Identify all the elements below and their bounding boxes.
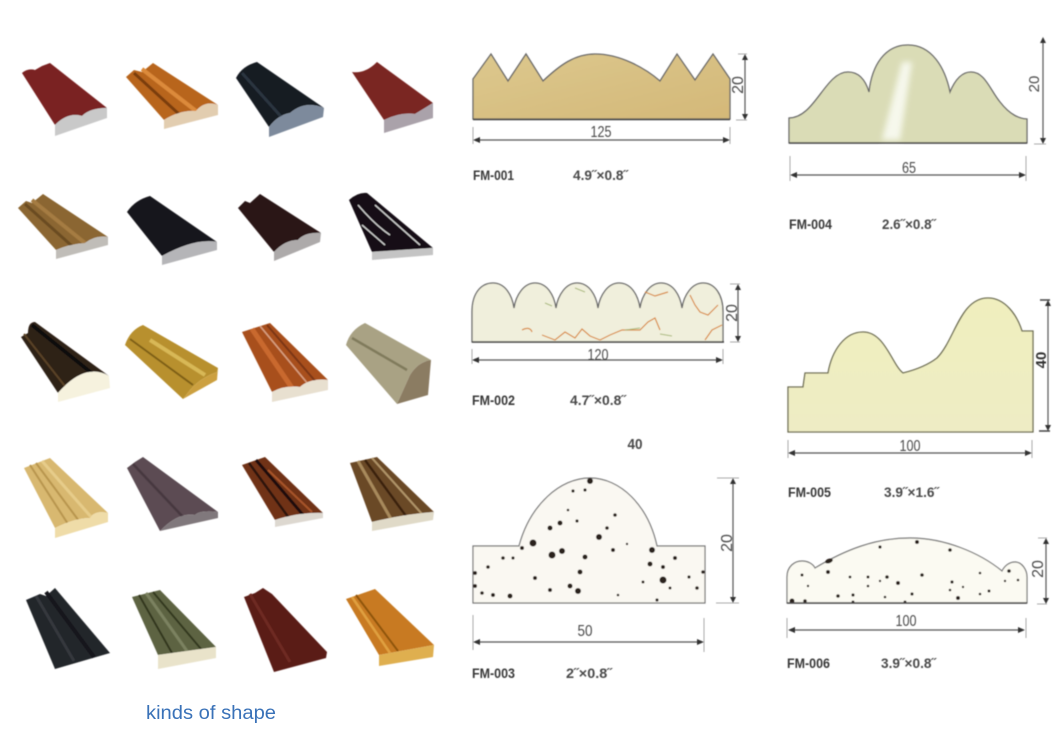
FM-006 width dimension: 100: [896, 613, 917, 630]
FM-005 width dimension: [788, 438, 1032, 458]
FM-001 shape: [473, 54, 730, 119]
FM-002 height dimension: 20: [724, 304, 741, 322]
FM-006 height dimension: 20: [1030, 560, 1047, 578]
moulding sample 12: sandstone: [346, 323, 431, 404]
FM-001 height dimension: 20: [730, 76, 747, 94]
standalone dimension 40: 40: [628, 436, 642, 453]
moulding sample 1: red: [22, 63, 107, 136]
FM-004 height dimension: 20: [1026, 76, 1043, 92]
FM-003 label: FM-003: [472, 665, 515, 681]
moulding sample 16: brown gold ridged: [350, 457, 434, 531]
FM-004 highlight streak: [882, 62, 912, 140]
FM-003 height dimension: [716, 478, 739, 603]
moulding sample 2: orange wood: [126, 63, 218, 129]
FM-006 size: 3.9˝×0.8˝: [881, 655, 937, 671]
panel: FM-003 profile: [472, 478, 739, 681]
FM-004 width dimension: 65: [902, 160, 916, 177]
FM-004 width dimension: [790, 156, 1026, 181]
FM-002 size: 4.7˝×0.8˝: [570, 392, 627, 408]
FM-005 label: FM-005: [788, 484, 831, 500]
moulding sample 9: dark with cream end: [21, 322, 110, 402]
panel: FM-001 profile: [473, 54, 748, 183]
FM-004 base line: [789, 142, 1027, 144]
panel: FM-005 profile: [788, 298, 1051, 500]
FM-006 height dimension: [1030, 538, 1049, 604]
panel: moulding samples grid: [18, 62, 434, 672]
moulding sample 10: gold: [125, 325, 218, 399]
FM-003 width dimension: [473, 615, 704, 652]
FM-004 height dimension: [1026, 37, 1046, 144]
moulding sample 8: black marble: [349, 193, 433, 260]
FM-005 width dimension: 100: [900, 438, 921, 455]
moulding sample 14: grey purple stone: [127, 457, 218, 531]
moulding sample 4: red: [352, 62, 433, 133]
FM-002 width dimension: 120: [588, 347, 609, 364]
FM-003 height dimension: 20: [719, 534, 736, 552]
FM-002 height dimension: [724, 284, 741, 342]
moulding sample 13: cream tan: [24, 458, 108, 538]
panel: FM-002 profile: [472, 283, 741, 408]
FM-003 shape: [473, 478, 705, 603]
FM-005 height dimension: 40: [1033, 352, 1050, 368]
panel: FM-004 profile: [789, 37, 1046, 232]
caption: kinds of shape: kinds of shape: [146, 703, 276, 724]
FM-001 height dimension: [730, 54, 748, 120]
moulding sample 15: brown ridged: [242, 457, 323, 527]
FM-002 base line: [472, 341, 724, 343]
FM-006 shape: [787, 538, 1027, 603]
FM-006 width dimension: [787, 613, 1026, 638]
moulding sample 20: amber wood: [346, 589, 434, 666]
moulding sample 3: black blue: [236, 62, 324, 137]
moulding sample 5: light brown: [18, 194, 108, 259]
FM-004 size: 2.6˝×0.8˝: [882, 216, 937, 232]
FM-006 base line: [787, 602, 1027, 604]
FM-005 shape: [788, 298, 1033, 432]
moulding sample 6: black: [127, 196, 217, 265]
FM-004 shape: [789, 45, 1027, 143]
FM-001 width dimension: [473, 120, 730, 144]
FM-002 label: FM-002: [472, 392, 515, 408]
FM-001 width dimension: 125: [590, 124, 612, 141]
FM-005 size: 3.9˝×1.6˝: [884, 484, 940, 500]
moulding sample 19: dark red: [244, 588, 327, 672]
moulding sample 17: charcoal: [26, 588, 110, 669]
FM-001 label: FM-001: [473, 167, 514, 183]
FM-003 speckles: [473, 478, 705, 602]
FM-006 label: FM-006: [787, 655, 830, 671]
FM-003 width dimension: 50: [578, 623, 593, 640]
panel: FM-006 profile: [787, 538, 1049, 671]
FM-001 size: 4.9˝×0.8˝: [573, 167, 629, 183]
FM-002 width dimension: [472, 347, 723, 364]
FM-003 size: 2˝×0.8˝: [566, 665, 613, 681]
FM-002 orange veins: [522, 292, 722, 340]
FM-005 height dimension: [1033, 300, 1051, 431]
moulding sample 11: red-orange wood: [242, 323, 328, 402]
FM-004 label: FM-004: [789, 216, 832, 232]
FM-006 speckles: [790, 540, 1019, 604]
moulding sample 18: olive green: [132, 590, 216, 669]
FM-002 shape: [472, 283, 723, 342]
moulding sample 7: dark brown: [238, 194, 321, 261]
